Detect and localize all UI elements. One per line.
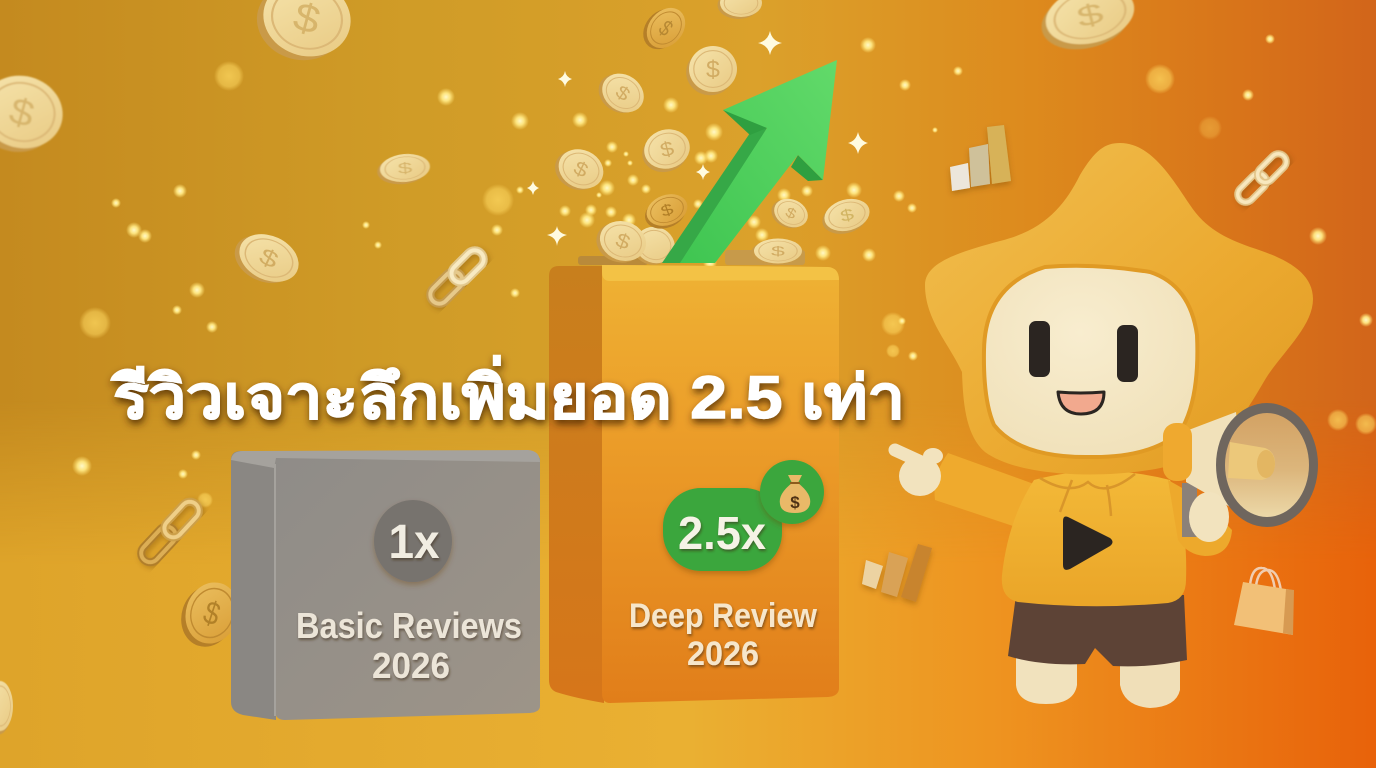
left eye — [1029, 321, 1050, 377]
box side and front faces — [549, 265, 839, 703]
money bag badge — [760, 460, 824, 524]
bar icon top — [950, 125, 1011, 191]
play icon — [1063, 516, 1112, 570]
burst coins above box: $ — [570, 156, 592, 182]
right eye — [1117, 325, 1138, 382]
2.5x value: 2.5x — [678, 507, 766, 559]
burst coins above box: $ — [771, 244, 785, 259]
shopping bag icon — [1234, 568, 1294, 635]
burst coins above box: $ — [706, 57, 720, 83]
right sleeve — [1168, 480, 1232, 556]
bokeh and sparkle particles — [72, 31, 1376, 508]
green growth arrow — [662, 60, 837, 263]
coin by grey box — [173, 575, 246, 655]
coin bottom left edge — [0, 681, 13, 734]
floating coin top left — [248, 0, 359, 71]
pointing arm — [935, 453, 1045, 526]
hoodie body — [1002, 471, 1186, 606]
face — [984, 266, 1197, 457]
tall orange bar: Deep Review — [549, 265, 839, 703]
small blurred coin: $ — [397, 160, 413, 177]
burst coins above box: $ — [658, 136, 676, 162]
coin near left centre: $ — [255, 243, 283, 274]
chain link lower left — [138, 498, 202, 566]
right leg — [1120, 655, 1180, 708]
burst coins above box: $ — [839, 206, 856, 226]
left leg — [1016, 655, 1077, 704]
2.5x green pill — [663, 488, 782, 571]
megaphone — [1163, 403, 1318, 537]
burst coins above box: $ — [612, 81, 634, 106]
hand holding megaphone — [1189, 492, 1229, 542]
hoodie strings — [1040, 474, 1135, 516]
hood star — [925, 143, 1313, 475]
1x value: 1x — [388, 516, 440, 569]
smile — [1058, 392, 1104, 414]
mascot character — [895, 143, 1318, 708]
bar icon lower — [862, 544, 932, 602]
grey bar: Basic Reviews — [231, 450, 540, 720]
Basic Reviews label: Basic Reviews — [296, 605, 522, 646]
Deep Review label: Deep Review — [629, 597, 817, 635]
title: รีวิวเจาะลึกเพิ่มยอด 2.5 เท่า — [110, 355, 905, 431]
burst coins above box: $ — [783, 204, 799, 223]
coins behind box — [578, 220, 805, 271]
1x circle badge — [374, 500, 452, 582]
chain link upper right — [1234, 150, 1290, 206]
small blurred coin — [376, 152, 431, 186]
burst coins above box: $ — [654, 15, 678, 42]
box side and front faces — [231, 450, 540, 720]
2026 label: 2026 — [372, 645, 450, 686]
pointing hand — [895, 448, 943, 496]
burst coins above box: $ — [659, 200, 676, 221]
shorts — [1008, 595, 1187, 666]
coin top right blurred — [1034, 0, 1141, 58]
burst coins above box — [548, 0, 874, 270]
chain link centre left — [427, 247, 487, 307]
money bag badge: $ — [790, 493, 800, 512]
burst coins above box: $ — [613, 228, 634, 254]
coin by grey box: $ — [199, 594, 225, 633]
coin near left centre — [227, 223, 306, 294]
floating coin left edge: $ — [5, 89, 39, 136]
floating coin left edge — [0, 65, 71, 162]
2026 label: 2026 — [687, 635, 759, 673]
